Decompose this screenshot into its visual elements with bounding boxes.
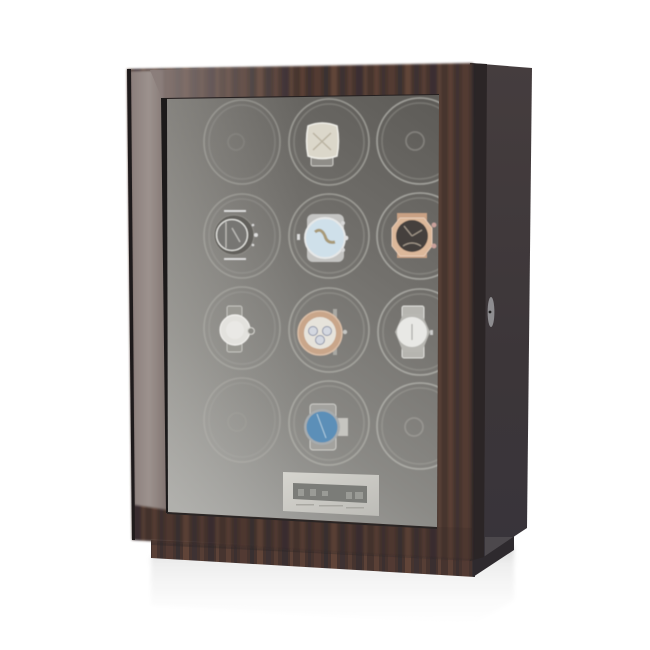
top frame reflection fade [150,66,300,99]
left frame reflection [130,70,168,510]
watch: blue dial [304,404,348,450]
watch: rose bezel chronograph [298,309,347,355]
bottom frame darkening [132,506,472,560]
winder rings [204,98,463,469]
LCD control panel [283,472,379,516]
LCD display [293,483,367,503]
cabinet side panel [470,63,532,561]
panel small labels [296,504,364,508]
winder rotors and watches [204,98,463,469]
watch: tonneau [306,123,338,166]
watch: steel bracelet [395,306,433,358]
watch: white round dial [220,306,254,352]
watch: pale blue dial [297,214,348,262]
floor shadow [151,545,514,625]
front wood frame [127,63,473,560]
watch: dark dial chronograph [214,210,258,260]
watch: rose gold square [392,213,436,258]
LCD digits [298,489,363,499]
cabinet base [151,535,514,577]
glass door [167,95,463,527]
icon: side lock [488,297,494,327]
illustration: watch winder cabinet [125,61,532,588]
